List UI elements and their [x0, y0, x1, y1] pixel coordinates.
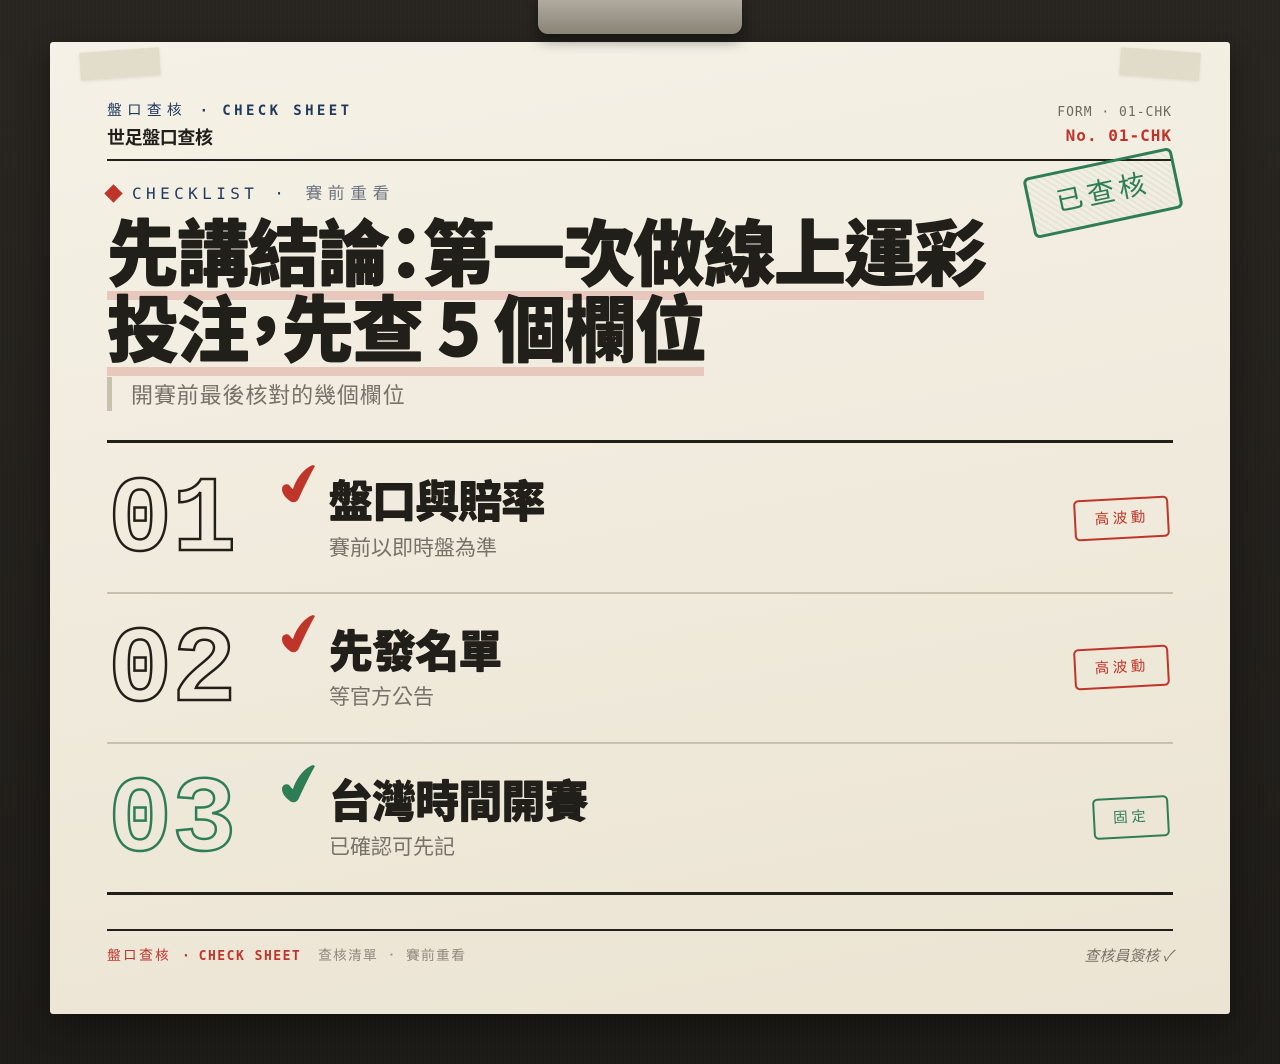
header label: 盤口查核 · CHECK SHEET: [107, 102, 352, 119]
item title 2: 先發名單: [329, 616, 501, 680]
tag 1: [1073, 496, 1170, 541]
title highlight line 2: [107, 367, 704, 376]
item title 1: 盤口與賠率: [329, 466, 544, 530]
tag 2: 高波動: [1094, 658, 1149, 675]
header rule: [107, 159, 1173, 161]
title: [107, 196, 986, 377]
stamp: verified: [1022, 147, 1184, 239]
footer middle: 查核清單 · 賽前重看: [318, 948, 466, 962]
check 2: [282, 615, 315, 652]
binder clip: [538, 0, 742, 34]
title: 先講結論：第一次做線上運彩: [107, 196, 985, 301]
item 3: [112, 765, 1170, 861]
kicker: CHECKLIST · 賽前重看: [132, 184, 395, 203]
title: 投注，先查 5 個欄位: [107, 272, 705, 377]
footer left: 盤口查核 · CHECK SHEET: [107, 948, 301, 964]
item note 2: 等官方公告: [329, 681, 434, 711]
item note 1: 賽前以即時盤為準: [329, 532, 497, 562]
title highlights: [107, 291, 984, 300]
tag 3: 固定: [1113, 808, 1149, 825]
item note 3: 已確認可先記: [329, 831, 455, 861]
check 3: [282, 765, 315, 802]
diamond icon: [104, 184, 123, 203]
tag 3: [1092, 795, 1170, 840]
stamp: verified: 已查核: [1053, 168, 1153, 216]
tag 2: [1073, 645, 1170, 690]
header subtitle: 世足盤口查核: [107, 124, 213, 150]
item 1: [112, 465, 1170, 562]
footer signature: 查核員簽核 ✓: [1084, 945, 1173, 966]
tape left: [79, 47, 161, 81]
form number: FORM · 01-CHK: [1057, 105, 1172, 120]
top rule: [107, 440, 1173, 443]
subtitle: 開賽前最後核對的幾個欄位: [131, 378, 406, 410]
tag 1: 高波動: [1094, 509, 1149, 526]
item title 3: 台灣時間開賽: [329, 766, 588, 830]
serial number: No. 01-CHK: [1066, 126, 1172, 145]
item 2: [112, 615, 1170, 711]
check 1: [282, 465, 315, 502]
tape right: [1119, 47, 1201, 81]
